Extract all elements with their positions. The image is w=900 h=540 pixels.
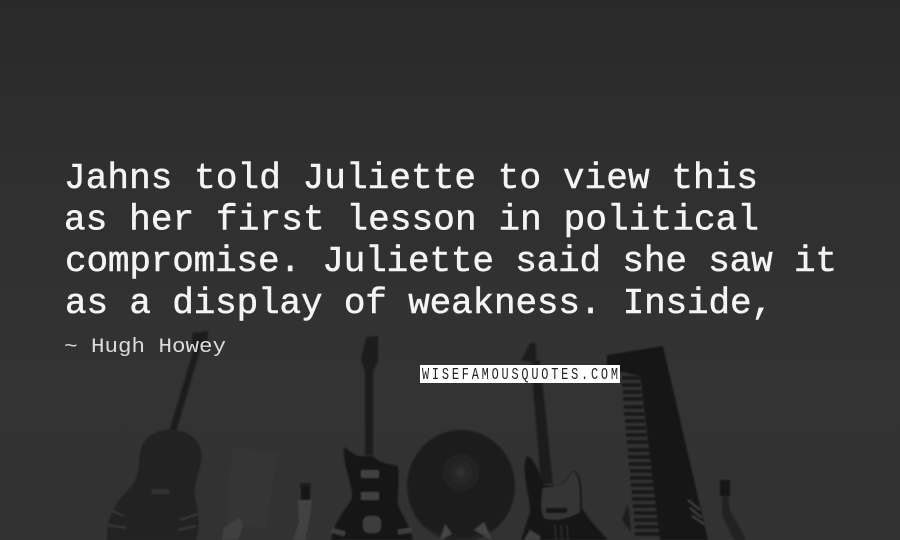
- watermark logo: WISEFAMOUSQUOTES.COM: [422, 366, 618, 385]
- icon: raised hand left: [222, 517, 243, 540]
- quote text: Jahns told Juliette to view this: [64, 158, 758, 199]
- icon: hand holding microphone: [293, 483, 312, 540]
- instruments silhouette: [107, 331, 746, 540]
- icon: sheet of paper: [226, 447, 277, 528]
- quote text: compromise. Juliette said she saw it: [65, 241, 837, 282]
- author attribution: ~ Hugh Howey: [64, 336, 226, 359]
- quote text: [64, 158, 837, 324]
- icon: electric guitar: [331, 336, 413, 540]
- icon: keyboard: [607, 346, 708, 540]
- quote text: as a display of weakness. Inside,: [65, 283, 773, 324]
- icon: cymbal: [407, 430, 515, 540]
- icon: bass guitar: [520, 343, 608, 540]
- quote text: as her first lesson in political: [64, 200, 759, 240]
- icon: acoustic guitar: [107, 331, 208, 540]
- icon: hand holding microphone right: [720, 480, 746, 540]
